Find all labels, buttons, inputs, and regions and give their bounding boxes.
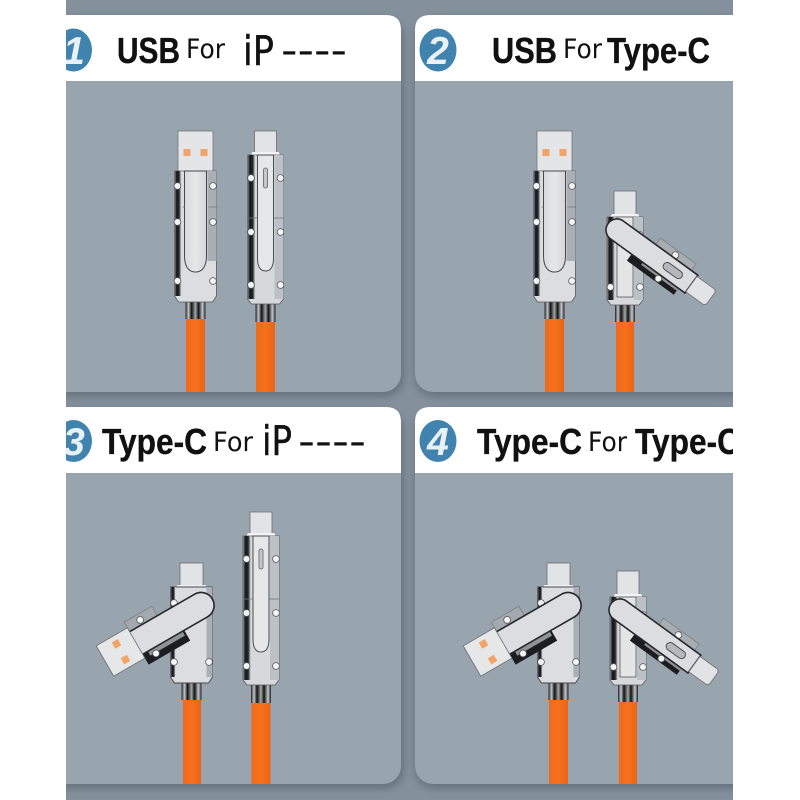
heading 2: USB [492,30,557,71]
cable: Type-C plug [243,512,279,784]
heading 4 [477,428,733,462]
heading 3: For [213,427,254,458]
heading 1: USB [117,30,180,71]
number badge 3: 3 [63,421,85,464]
panel 3: Type-C for iP [50,407,404,789]
cable: Type-C plug [248,131,284,392]
cable: USB-A on rotated arm [460,563,592,784]
panel 4: Type-C for Type-C [415,407,760,789]
heading 2: For [563,34,603,65]
heading 2 [494,37,710,71]
panel 2 header [415,15,760,81]
heading 1: For [186,34,226,65]
heading 4: For [588,427,628,458]
cable: Type-C with rotated arm [608,570,718,784]
number badge 4: 4 [426,421,449,464]
panel 1: USB for iP [50,15,404,397]
heading 3 [102,424,364,462]
number badge 1 [66,28,92,72]
heading 4: Type-C [477,421,582,462]
heading 1: ---- [281,28,347,74]
heading 2: Type-C [607,30,710,71]
panel 4 header [415,407,760,473]
panel 2: USB for Type-C [415,15,760,397]
number badge 3 [66,420,92,462]
heading 1 [118,34,345,66]
number badge 2: 2 [426,30,449,73]
panel 1 header [50,15,401,81]
cable: USB-A plug [174,131,216,392]
number badge 2 [420,28,456,73]
heading 4: Type-C [635,421,740,462]
heading 3: Type-C [102,421,207,462]
heading 3: iP [262,417,292,465]
panel 3 header [50,407,401,473]
cable: USB-A plug [533,131,576,392]
number badge 4 [420,420,456,464]
heading 1: iP [243,27,274,75]
cable: Type-C with rotated arm [605,190,716,392]
cable: USB-A on rotated arm [93,563,225,784]
heading 3: ---- [298,419,366,465]
number badge 1: 1 [63,30,85,73]
